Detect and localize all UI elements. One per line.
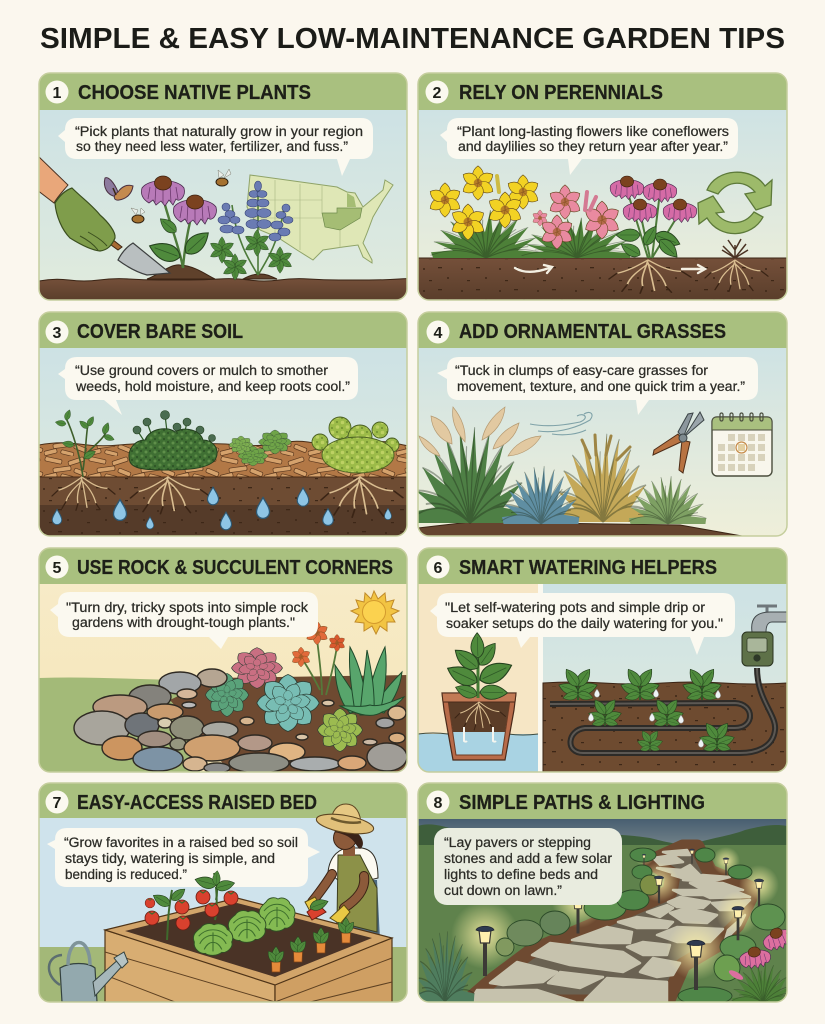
light glows bbox=[451, 846, 779, 980]
distant hedges bbox=[418, 824, 787, 848]
quote bubble: stones and add a few solar bbox=[444, 851, 613, 866]
icon: wind lines bbox=[530, 412, 592, 435]
quote bubble: “Pick plants that naturally grow in your region bbox=[75, 124, 363, 139]
soil layers bbox=[39, 476, 407, 536]
heading: SMART WATERING HELPERS bbox=[459, 557, 717, 579]
quote bubble: “Grow favorites in a raised bed so soil bbox=[64, 835, 298, 850]
icon: potted plant bbox=[444, 639, 515, 701]
icon: carrots bbox=[266, 917, 356, 972]
shrubs bbox=[496, 848, 785, 1005]
quote bubble: "Let self-watering pots and simple drip or bbox=[445, 600, 706, 615]
heading: COVER BARE SOIL bbox=[77, 321, 243, 343]
panel: 4 ornamental grasses bbox=[412, 312, 787, 536]
quote bubble: so they need less water, fertilizer, and fuss.” bbox=[76, 139, 348, 154]
icon: succulent rosettes bbox=[205, 648, 362, 752]
quote bubble bbox=[58, 118, 373, 176]
quote bubble bbox=[58, 357, 358, 415]
water basin bbox=[418, 734, 538, 772]
icon: blue fescue bbox=[502, 466, 579, 524]
number badge 6: 6 bbox=[434, 560, 443, 577]
quote bubble: gardens with drought-tough plants." bbox=[72, 615, 295, 630]
soil ground bbox=[39, 279, 429, 300]
icon: yellow-green sedum bbox=[312, 417, 399, 473]
quote bubble: lights to define beds and bbox=[444, 867, 598, 882]
heading: ADD ORNAMENTAL GRASSES bbox=[459, 321, 726, 343]
quote bubble bbox=[434, 828, 622, 905]
title: SIMPLE & EASY LOW-MAINTENANCE GARDEN TIPS bbox=[40, 23, 785, 55]
panel: 3 cover bare soil bbox=[39, 312, 439, 536]
quote bubble: weeds, hold moisture, and keep roots cool.” bbox=[75, 379, 350, 394]
icon: gloved hand with trowel bbox=[37, 155, 170, 275]
number badge 4: 4 bbox=[434, 325, 443, 342]
heading: USE ROCK & SUCCULENT CORNERS bbox=[77, 557, 393, 579]
header bbox=[39, 548, 407, 584]
icon: gold grass bbox=[556, 434, 650, 522]
quote bubble bbox=[430, 593, 735, 655]
potted plant top leaf bbox=[470, 633, 484, 658]
number badge 2: 2 bbox=[433, 85, 442, 102]
quote bubble: “Use ground covers or mulch to smother bbox=[75, 363, 329, 378]
icon: butterfly and bees bbox=[104, 169, 231, 223]
number badge 2 bbox=[426, 80, 448, 104]
quote bubble: stays tidy, watering is simple, and bbox=[65, 851, 275, 866]
icon: gardener bbox=[305, 804, 380, 940]
grass ground bbox=[39, 677, 200, 772]
icon: calendar bbox=[712, 413, 772, 476]
heading: RELY ON PERENNIALS bbox=[459, 82, 663, 104]
number badge 7: 7 bbox=[53, 795, 62, 812]
heading: EASY-ACCESS RAISED BED bbox=[77, 792, 317, 814]
panel: 1 choose native plants bbox=[37, 73, 429, 300]
header bbox=[418, 73, 787, 110]
icon: pink lilies bbox=[522, 185, 631, 258]
arrows bbox=[515, 265, 705, 273]
grass ground bbox=[39, 947, 407, 1002]
header bbox=[39, 312, 407, 348]
number badge 3: 3 bbox=[53, 325, 62, 342]
icon: watering can bbox=[49, 942, 128, 1002]
number badge 5 bbox=[46, 556, 68, 578]
icon: roots bbox=[52, 477, 403, 517]
heading: CHOOSE NATIVE PLANTS bbox=[78, 82, 311, 104]
icon: sun bbox=[351, 591, 399, 634]
quote bubble bbox=[50, 592, 318, 649]
quote bubble: and daylilies so they return year after year.” bbox=[458, 139, 728, 154]
icon: dormant plant with roots bbox=[705, 239, 768, 292]
soil bed bbox=[543, 682, 787, 772]
icon: lupines bbox=[209, 181, 293, 280]
number badge 3 bbox=[46, 320, 68, 344]
header bbox=[418, 783, 787, 819]
icon: aloe bbox=[335, 647, 404, 715]
garden path bbox=[467, 847, 750, 1002]
quote bubble: movement, texture, and one quick trim a year.” bbox=[457, 379, 745, 394]
drip hose bbox=[550, 668, 775, 753]
quote bubble: “Tuck in clumps of easy-care grasses for bbox=[455, 363, 709, 378]
icon: tomato plants bbox=[145, 873, 238, 940]
panel: 8 paths and lighting bbox=[415, 783, 796, 1005]
header bbox=[418, 548, 787, 584]
icon: pink flowers bbox=[728, 923, 796, 1003]
quote bubble: “Lay pavers or stepping bbox=[444, 835, 591, 850]
icon: thyme ground cover bbox=[129, 410, 217, 470]
header bbox=[39, 73, 407, 110]
number badge 1: 1 bbox=[53, 85, 62, 102]
icon: daylilies bbox=[428, 166, 540, 258]
soil mound bbox=[419, 523, 742, 536]
panel: 7 raised bed bbox=[39, 783, 407, 1002]
lawn bbox=[418, 845, 787, 1002]
icon: coneflowers bbox=[141, 176, 216, 268]
soil ground bbox=[418, 258, 787, 300]
number badge 8 bbox=[426, 790, 450, 814]
mulch layer bbox=[39, 441, 439, 477]
panel: 6 smart watering helpers bbox=[418, 548, 789, 772]
icon: water timer bbox=[742, 632, 773, 666]
icon: lettuces bbox=[193, 898, 295, 955]
icon: recycle arrows bbox=[698, 172, 772, 234]
quote bubble: bending is reduced.” bbox=[65, 867, 187, 882]
quote bubble: cut down on lawn.” bbox=[444, 883, 562, 898]
icon: solar lights bbox=[476, 849, 764, 990]
icon: faucet bbox=[752, 606, 789, 632]
quote bubble: “Plant long-lasting flowers like coneflowers bbox=[457, 124, 729, 139]
icon: self-watering pot bbox=[442, 693, 516, 760]
heading: SIMPLE PATHS & LIGHTING bbox=[459, 792, 705, 814]
icon: raised bed bbox=[105, 898, 392, 1002]
icon: orange flowers bbox=[291, 621, 346, 695]
quote bubble: soaker setups do the daily watering for you." bbox=[446, 616, 723, 631]
icon: coneflowers with roots bbox=[609, 176, 697, 293]
tomato plant top leaves bbox=[194, 870, 236, 900]
number badge 8: 8 bbox=[434, 795, 443, 812]
paving stones bbox=[470, 850, 750, 1002]
header bbox=[39, 783, 407, 818]
icon: green grass bbox=[629, 476, 706, 524]
header bbox=[418, 312, 787, 348]
quote bubble bbox=[437, 357, 758, 415]
seedlings bbox=[557, 666, 736, 753]
number badge 6 bbox=[426, 556, 450, 578]
icon: low succulents bbox=[229, 430, 292, 466]
quote bubble bbox=[47, 828, 320, 887]
icon: pruners bbox=[653, 412, 704, 473]
quote bubble: "Turn dry, tricky spots into simple rock bbox=[66, 600, 308, 615]
harvest in hands bbox=[307, 897, 330, 920]
soil bed bbox=[170, 675, 410, 772]
icon: US map bbox=[247, 175, 393, 263]
number badge 5: 5 bbox=[53, 560, 62, 577]
icon: spiky plant bbox=[415, 932, 474, 1002]
water droplets bbox=[588, 689, 721, 747]
panel: 5 rock and succulent corners bbox=[39, 548, 410, 773]
rocks bbox=[74, 669, 407, 773]
quote bubble bbox=[440, 118, 738, 175]
icon: water drops bbox=[52, 487, 392, 530]
number badge 1 bbox=[46, 80, 68, 104]
number badge 4 bbox=[426, 320, 450, 344]
number badge 7 bbox=[46, 790, 68, 814]
panel: 2 rely on perennials bbox=[418, 73, 787, 300]
icon: sprig seedling bbox=[55, 409, 115, 477]
icon: tall plume grass bbox=[412, 407, 541, 523]
